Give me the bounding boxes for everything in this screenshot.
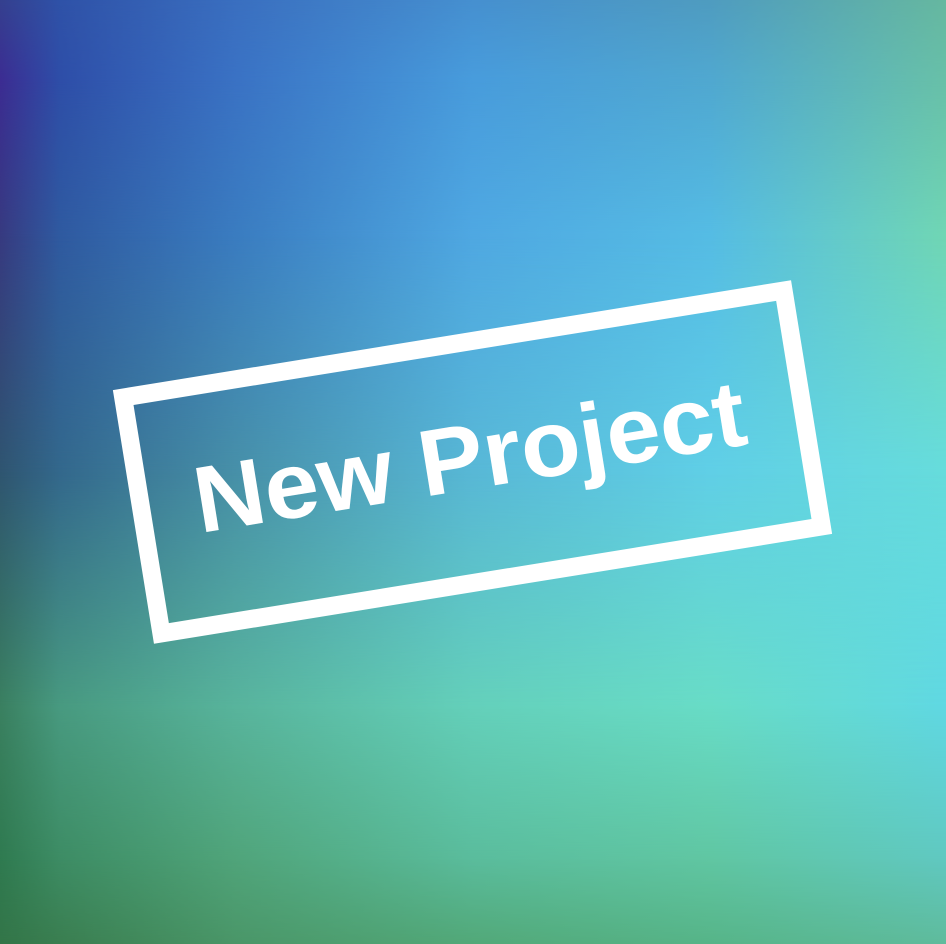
rotated rectangular frame xyxy=(123,291,822,633)
title: New Project: New Project xyxy=(186,360,753,553)
